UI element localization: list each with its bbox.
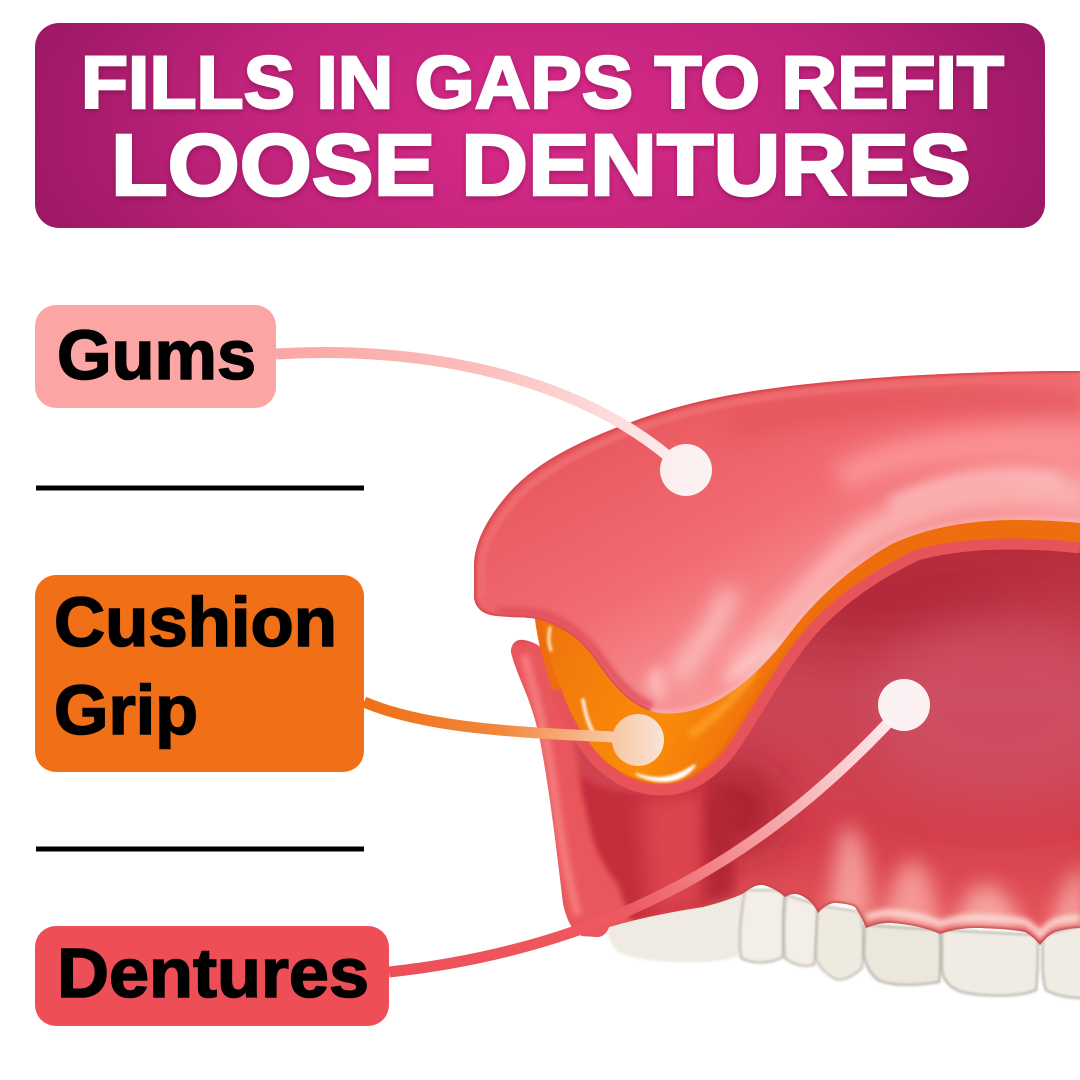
denture and gum illustration — [474, 371, 1080, 998]
denture body — [505, 542, 1080, 945]
headline line 1: FILLS IN GAPS TO REFIT — [81, 41, 1004, 124]
gum rim — [474, 371, 1080, 711]
divider — [36, 486, 364, 490]
label: gums: Gums — [57, 316, 256, 394]
flange — [511, 640, 632, 937]
leader: gums — [276, 352, 712, 496]
denture ridge — [556, 544, 1080, 790]
cushion grip adhesive — [538, 510, 1080, 786]
leader: cushion grip — [364, 702, 664, 766]
header banner — [35, 23, 1045, 228]
label: cushion grip — [35, 575, 364, 772]
label: cushion grip: Cushion — [54, 583, 337, 661]
label: dentures — [35, 926, 389, 1026]
label: dentures: Dentures — [57, 934, 369, 1012]
leader: dentures — [389, 679, 930, 972]
label: cushion grip: Grip — [54, 671, 198, 749]
gum shape — [474, 371, 1080, 714]
label: gums — [35, 305, 276, 408]
teeth — [605, 885, 1080, 998]
headline line 2: LOOSE DENTURES — [111, 117, 971, 214]
